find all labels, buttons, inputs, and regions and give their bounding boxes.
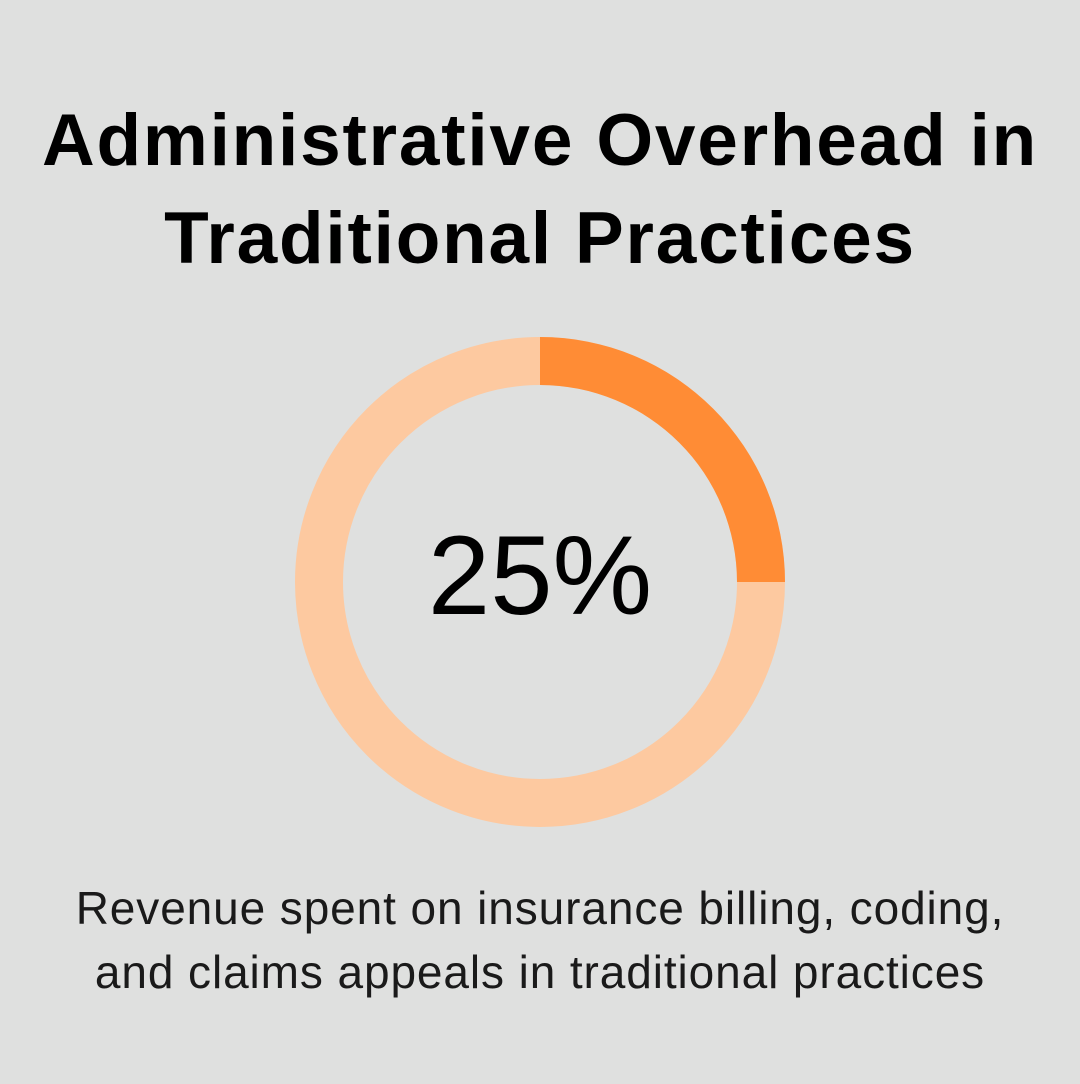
donut background ring xyxy=(319,361,761,803)
description text: and claims appeals in traditional practices xyxy=(95,946,985,998)
title: Traditional Practices xyxy=(164,198,916,279)
description text xyxy=(76,882,1004,998)
title xyxy=(42,100,1038,279)
description text: Revenue spent on insurance billing, coding, xyxy=(76,882,1004,934)
title: Administrative Overhead in xyxy=(42,100,1038,181)
center value: 25% xyxy=(428,513,652,638)
donut highlighted segment 25% xyxy=(540,337,785,582)
